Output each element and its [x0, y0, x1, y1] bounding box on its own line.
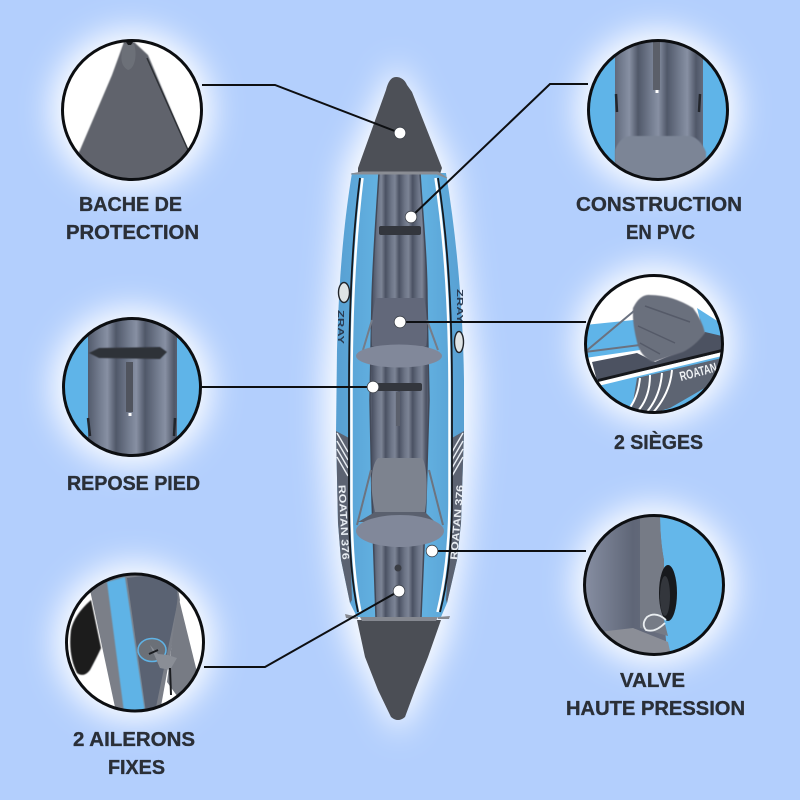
- seat rear base: [358, 512, 435, 522]
- label: REPOSE PIED: [67, 472, 200, 495]
- dot: bache: [394, 127, 406, 139]
- kayak: [336, 77, 467, 720]
- circle image: valve: [586, 517, 722, 653]
- hull white and black lines: [349, 178, 452, 612]
- floor valve: [394, 564, 402, 572]
- circle ring: [586, 276, 722, 412]
- connector dots: [367, 127, 438, 597]
- seat front cushion: [356, 344, 442, 368]
- label: 2 AILERONS: [73, 728, 195, 751]
- panel: bache de protection: [60, 38, 205, 244]
- dot: valve: [426, 545, 438, 557]
- kayak grey graphic bands: [336, 431, 464, 603]
- line: repose pied: [201, 386, 373, 388]
- panel: 2 ailerons fixes: [62, 570, 207, 779]
- circle ring: [64, 318, 200, 456]
- line: construction: [411, 84, 588, 217]
- line: sieges: [400, 321, 586, 323]
- inner side shadows: [370, 173, 429, 617]
- dot: ailerons: [393, 585, 405, 597]
- seat front backrest: [372, 298, 427, 346]
- circle image: seat: [587, 277, 721, 411]
- circle image: fin: [68, 576, 202, 710]
- label line 2: HAUTE PRESSION: [566, 697, 745, 720]
- label line 2: PROTECTION: [66, 221, 199, 244]
- seat front straps: [363, 320, 438, 350]
- panel: repose pied: [60, 315, 205, 495]
- seat rear backrest: [372, 458, 427, 512]
- dot: construction: [405, 211, 417, 223]
- dot: repose pied: [367, 381, 379, 393]
- dot: sieges: [394, 316, 406, 328]
- line: bache: [202, 85, 400, 133]
- label line 2: FIXES: [108, 756, 165, 779]
- footrest rear: [372, 383, 422, 391]
- seat rear cushion: [356, 515, 444, 547]
- circle image: floor tubes: [590, 42, 726, 178]
- circle ring: [62, 40, 202, 180]
- circle image: seat: ROATAN: [678, 360, 718, 384]
- bow cover trim: [351, 172, 447, 178]
- panel: valve haute pression: [566, 512, 745, 720]
- panel: 2 sieges: [585, 275, 725, 454]
- label line 2: EN PVC: [626, 221, 695, 244]
- connector lines: [201, 84, 588, 667]
- logo right: [454, 332, 464, 352]
- hull text right: ROATAN 376: [449, 484, 467, 560]
- label: VALVE: [620, 669, 685, 692]
- brand text right: ZRAY: [455, 289, 464, 324]
- white glow halo: [52, 30, 738, 736]
- logo left: [338, 282, 350, 302]
- circle ring: [588, 40, 728, 180]
- footrest front: [379, 226, 421, 235]
- strip rear: [396, 392, 400, 426]
- panel: construction en pvc: [576, 38, 742, 244]
- stern cover trim: [345, 614, 450, 621]
- seat rear straps: [357, 470, 443, 525]
- kayak chevrons: [337, 433, 463, 476]
- kayak hull: [336, 173, 464, 617]
- brand text left: ZRAY: [336, 310, 345, 345]
- label: 2 SIÈGES: [614, 431, 703, 454]
- label: CONSTRUCTION: [576, 193, 742, 216]
- circle image: footrest: [65, 320, 199, 454]
- circle ring: [66, 574, 204, 711]
- line: valve: [432, 550, 586, 552]
- circle ring: [584, 516, 724, 654]
- kayak floor tubes: [370, 173, 429, 617]
- circle image: bow cover: [64, 42, 200, 178]
- hull text left: ROATAN 376: [336, 485, 350, 561]
- line: ailerons: [204, 591, 399, 667]
- stern cover: [357, 620, 441, 720]
- label: BACHE DE: [79, 193, 182, 216]
- bow cover: [358, 77, 442, 174]
